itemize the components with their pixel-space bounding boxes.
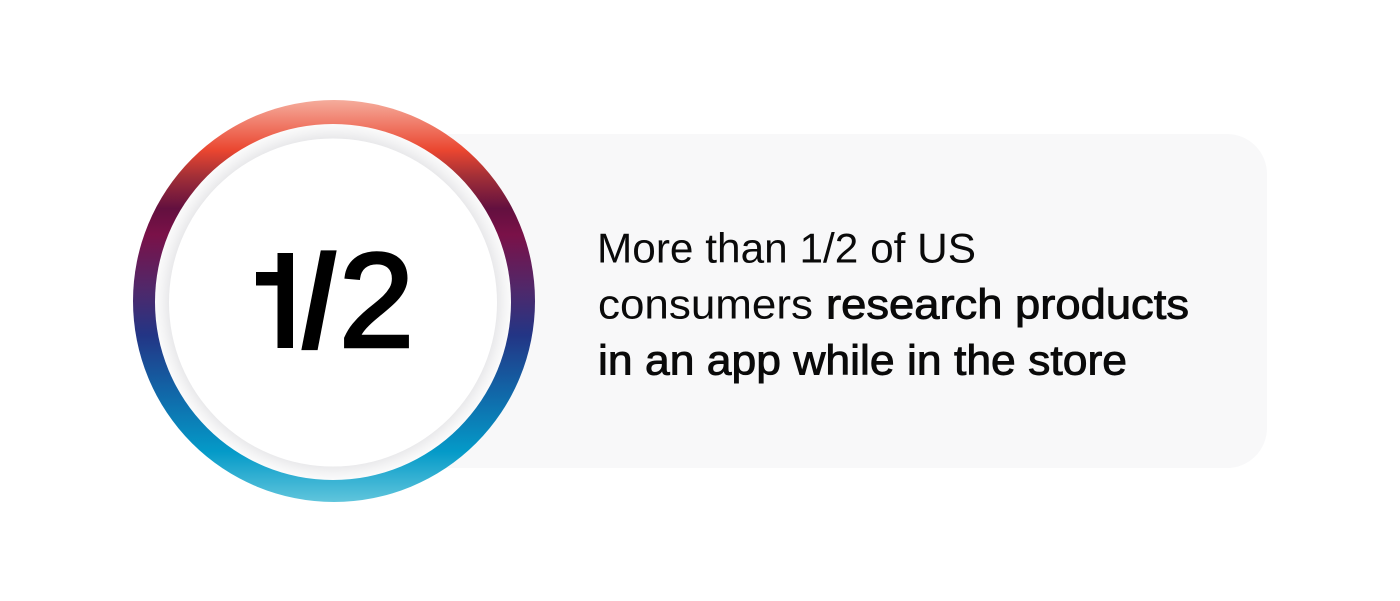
text block: statistic description (597, 224, 1189, 384)
ring: inner grey border (155, 124, 511, 480)
panel: text card background (400, 134, 1267, 468)
big number: 1/2: / (300, 228, 338, 376)
line 2: consumers (598, 280, 813, 328)
big number: 1/2 (256, 250, 409, 350)
gradient ring badge (133, 100, 535, 502)
line 2: research products (826, 280, 1189, 328)
big number: 1/2: 1 (242, 221, 320, 378)
ring: outer gradient circle (133, 100, 535, 502)
big number: 1/2: 2 (339, 226, 414, 376)
line 3: emphasis: in an app while in the store (598, 336, 1127, 384)
line 2 (598, 280, 1189, 328)
badge: white centre circle (169, 138, 497, 466)
line 1: More than 1/2 of US (597, 224, 976, 272)
